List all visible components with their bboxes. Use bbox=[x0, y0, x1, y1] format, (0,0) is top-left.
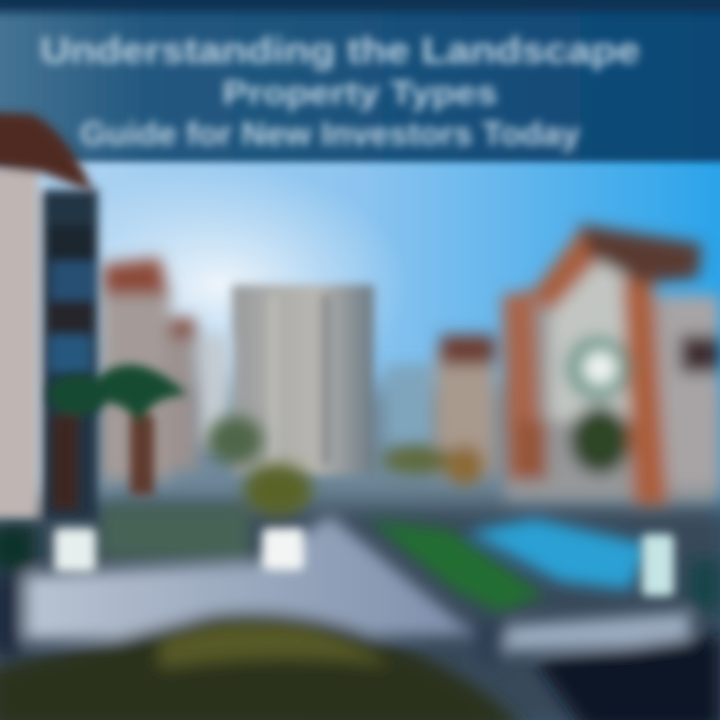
round feature and courtyard tree bbox=[515, 336, 630, 480]
right buildings bbox=[435, 224, 720, 505]
lawn bbox=[368, 520, 545, 612]
landscaping hedges bbox=[0, 416, 720, 610]
scene mid-ground bbox=[0, 224, 720, 720]
palm trees bbox=[48, 365, 188, 510]
background haze and ground base bbox=[0, 385, 720, 720]
left foreground building bbox=[0, 168, 98, 520]
central tower bbox=[232, 285, 374, 475]
pavement bbox=[25, 515, 690, 652]
left building roof bbox=[0, 112, 93, 192]
title text bbox=[40, 30, 640, 152]
title text: Understanding the Landscape bbox=[40, 30, 640, 71]
title text: Property Types bbox=[222, 74, 498, 111]
white lamps bbox=[54, 528, 674, 596]
title text: Guide for New Investors Today bbox=[80, 115, 581, 152]
dark foreground bbox=[0, 575, 720, 720]
swimming pool bbox=[468, 518, 650, 590]
distant buildings bbox=[195, 335, 435, 445]
left mid buildings bbox=[100, 258, 197, 480]
title banner bbox=[0, 0, 720, 162]
